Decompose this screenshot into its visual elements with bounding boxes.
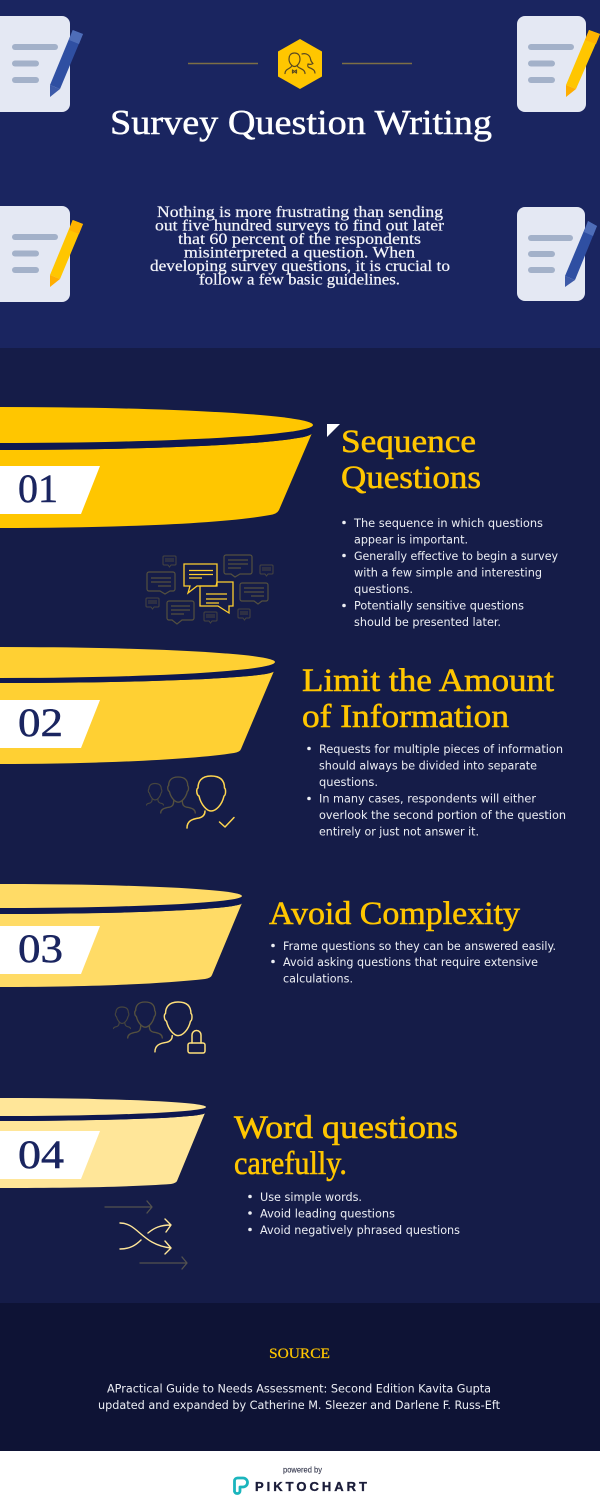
heading: limit the amount of information: Limit the Amount [302,663,554,699]
text block: complexity bullets: calculations. [283,972,353,986]
text block: introduction: Nothing is more frustrating than sending [157,204,443,221]
heading: sequence questions [341,424,481,496]
funnel tier 01 [0,407,313,528]
text block: limit bullets: entirely or just not answer it. [319,826,479,838]
heading: avoid complexity: Avoid Complexity [269,896,521,932]
panel: source background [0,1303,600,1451]
text block: complexity bullets: Frame questions so they can be answered easily. [283,940,556,953]
icon: speech bubbles [146,555,273,624]
branding: piktochart logo: powered by [283,1464,323,1474]
text block: introduction: follow a few basic guidelines. [199,272,400,288]
text block: introduction: out five hundred surveys to find out later [155,218,445,234]
panel: header background [0,0,600,348]
icon: shuffle arrows [105,1201,187,1269]
panel: branding background [0,1451,600,1511]
text block: wording bullets: Avoid negatively phrased questions [260,1224,460,1237]
number 03: 03 [18,926,63,971]
funnel tier 04 [0,1098,206,1188]
number 04: 04 [18,1132,64,1177]
heading: word questions carefully [234,1110,458,1182]
text block: complexity bullets [271,940,556,986]
icon: document with blue pencil lower right [517,207,597,301]
icon: white corner triangle [327,424,340,437]
heading: sequence questions: Sequence [341,424,476,460]
icon: people with check mark [147,776,234,828]
number 01: 01 [18,466,58,511]
text block: sequence bullets [342,517,558,629]
source label: SOURCE [269,1346,330,1362]
text block: source citation [98,1382,501,1412]
text block: wording bullets: Use simple words. [260,1191,362,1204]
text block: complexity bullets: Avoid asking questions that require extensive [283,956,538,969]
heading: limit the amount of information [302,663,554,735]
heading: limit the amount of information: of Information [302,699,509,735]
text block: wording bullets: Avoid leading questions [260,1208,395,1220]
text block: sequence bullets: Potentially sensitive questions [354,600,524,612]
branding: piktochart logo [234,1464,367,1494]
text block: limit bullets [307,743,566,838]
number 02: 02 [18,700,63,745]
text block: limit bullets: In many cases, respondents will either [319,792,536,806]
branding: piktochart logo: PIKTOCHART [255,1479,367,1494]
heading: word questions carefully: Word questions [234,1110,458,1146]
text block: source citation: updated and expanded by Catherine M. Sleezer and Darlene F. Russ-Eft [98,1399,501,1412]
text block: introduction [150,204,450,288]
text block: sequence bullets: Generally effective to begin a survey [354,550,558,563]
funnel tier 03 [0,884,242,987]
text block: sequence bullets: with a few simple and interesting [354,566,542,580]
text block: limit bullets: should always be divided into separate [319,760,537,772]
text block: introduction: developing survey questions, it is crucial to [150,258,450,275]
text block: sequence bullets: The sequence in which questions [353,517,543,530]
icon: people with padlock [114,1002,205,1053]
text block: sequence bullets: should be presented later. [354,616,501,629]
text block: limit bullets: overlook the second portion of the question [319,809,566,822]
title: Survey Question Writing [110,103,492,142]
text block: sequence bullets: appear is important. [354,534,468,546]
text block: sequence bullets: questions. [354,583,413,596]
panel: main background [0,348,600,1303]
text block: introduction: that 60 percent of the respondents [178,231,421,248]
heading: word questions carefully: carefully. [234,1146,347,1182]
text block: introduction: misinterpreted a question. When [184,244,415,262]
text block: limit bullets: questions. [319,776,378,789]
text block: limit bullets: Requests for multiple pieces of information [319,743,563,756]
text block: wording bullets [248,1191,460,1237]
heading: sequence questions: Questions [341,460,481,496]
text block: source citation: APractical Guide to Needs Assessment: Second Edition Kavita Gupta [107,1382,491,1396]
icon: hexagon with people [278,39,322,89]
icon: document with yellow pencil top right [517,16,600,112]
icon: document with blue pencil top left [0,16,83,112]
icon: document with yellow pencil lower left [0,206,83,302]
funnel tier 02 [0,647,275,764]
